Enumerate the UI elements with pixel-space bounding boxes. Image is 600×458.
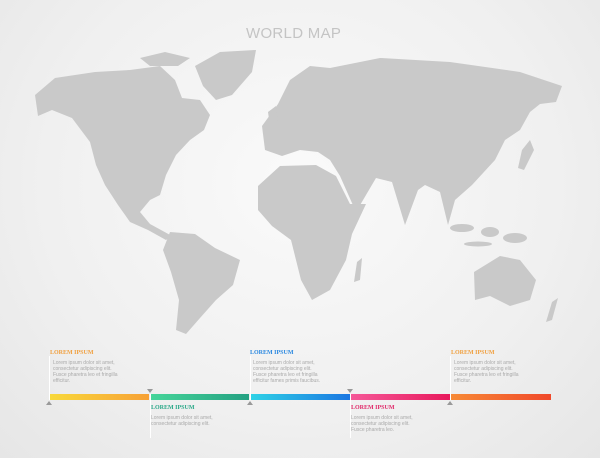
- step 2: Lorem ipsum dolor sit amet, consectetur adipiscing elit.: [151, 415, 213, 427]
- step 5: LOREM IPSUM: [451, 350, 494, 356]
- step 4: Lorem ipsum dolor sit amet, consectetur adipiscing elit. Fusce pharetra leo.: [351, 415, 413, 433]
- step 4: [351, 405, 413, 433]
- step 1: Lorem ipsum dolor sit amet, consectetur adipiscing elit. Fusce pharetra leo et fringilla efficitur.: [53, 360, 117, 384]
- arctic islands: [140, 52, 190, 66]
- step 2: LOREM IPSUM: [151, 405, 194, 411]
- new zealand: [546, 298, 558, 322]
- north america: [35, 66, 210, 240]
- south america: [163, 232, 240, 334]
- greenland: [195, 50, 256, 100]
- step 1: LOREM IPSUM: [50, 350, 94, 356]
- step 5: [451, 350, 518, 384]
- australia: [474, 256, 536, 306]
- step 2: [151, 405, 213, 427]
- uk: [268, 106, 278, 126]
- step 5: Lorem ipsum dolor sit amet, consectetur adipiscing elit. Fusce pharetra leo et fringilla efficitur.: [454, 360, 518, 384]
- timeline bar: [50, 394, 551, 400]
- title: WORLD MAP: [246, 25, 341, 42]
- step 1: [50, 350, 118, 384]
- timeline: [46, 350, 551, 438]
- japan: [518, 140, 534, 170]
- madagascar: [354, 258, 362, 282]
- world map: [35, 50, 562, 334]
- step 3: LOREM IPSUM: [250, 350, 294, 356]
- markers: [46, 401, 52, 405]
- step 3: Lorem ipsum dolor sit amet, consectetur adipiscing elit. Fusce pharetra leo et fringilla efficitur fames primis faucibus.: [253, 360, 320, 384]
- step 3: [250, 350, 320, 384]
- step 4: LOREM IPSUM: [351, 405, 394, 411]
- indonesia: [450, 224, 474, 232]
- eurasia: [262, 58, 562, 225]
- africa: [258, 165, 366, 300]
